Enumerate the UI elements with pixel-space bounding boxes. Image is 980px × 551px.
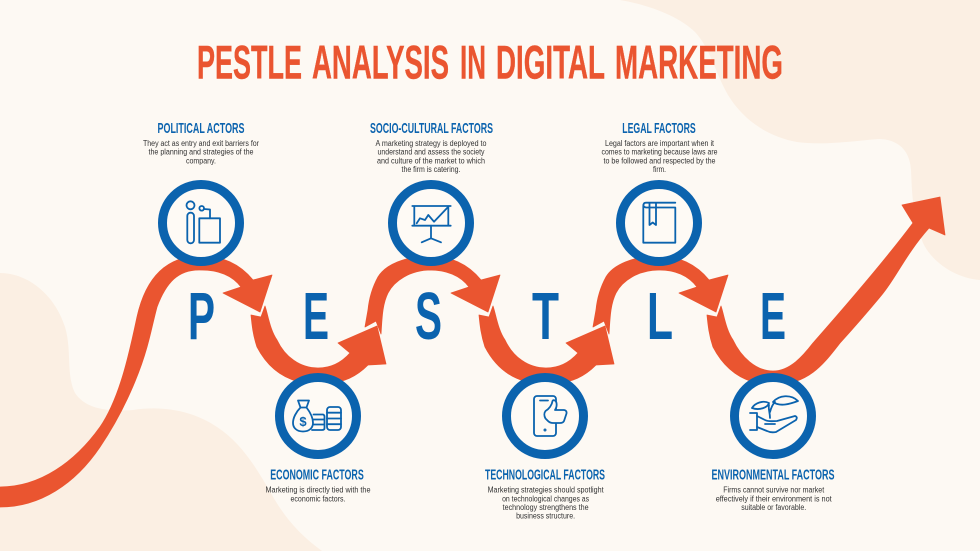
description: technology strengthens the xyxy=(503,503,589,512)
description: business structure. xyxy=(516,512,575,521)
letters: PESTLE: T xyxy=(532,279,559,354)
letters: PESTLE: S xyxy=(415,279,442,354)
description xyxy=(266,486,371,503)
description: on technological changes as xyxy=(502,494,589,503)
description xyxy=(143,139,259,165)
background blob: bottom left xyxy=(0,273,322,551)
heading: ECONOMIC FACTORS xyxy=(270,466,364,484)
title: PESTLE xyxy=(197,36,302,90)
arrow path xyxy=(0,197,945,507)
description: to be followed and respected by the xyxy=(604,156,716,165)
icon: speaker at podium xyxy=(186,201,220,243)
icon: presentation board xyxy=(412,206,451,242)
panel: legal factors xyxy=(602,120,718,262)
description: A marketing strategy is deployed to xyxy=(376,139,487,148)
description: comes to marketing because laws are xyxy=(602,148,718,157)
description: and culture of the market to which xyxy=(377,156,485,165)
description: company. xyxy=(186,156,216,165)
icon: dollar sign: $ xyxy=(299,414,307,429)
arrow head after L xyxy=(659,256,728,312)
icon ring xyxy=(734,378,812,454)
icon ring xyxy=(392,184,470,262)
arrow segment: through T xyxy=(479,306,614,384)
heading: SOCIO-CULTURAL FACTORS xyxy=(370,120,493,137)
letters: PESTLE xyxy=(188,279,786,354)
arrow segment: through E to final arrow head xyxy=(707,197,945,385)
icon: book with bookmark xyxy=(643,203,675,243)
icon ring xyxy=(506,378,584,454)
description: suitable or favorable. xyxy=(741,503,806,512)
description: firm. xyxy=(653,165,666,174)
heading: TECHNOLOGICAL FACTORS xyxy=(485,466,605,484)
icon ring xyxy=(162,184,240,262)
title: ANALYSIS xyxy=(312,36,449,90)
panel: technological factors xyxy=(485,378,605,521)
letters: PESTLE: E xyxy=(760,279,786,354)
heading: LEGAL FACTORS xyxy=(622,120,696,137)
panel: economic factors xyxy=(266,378,371,503)
icon: phone with thumbs up xyxy=(534,396,567,436)
heading: POLITICAL ACTORS xyxy=(158,120,244,137)
arrow head after P xyxy=(201,256,272,312)
panel: environmental factors xyxy=(712,378,834,512)
title xyxy=(197,36,783,90)
description: Firms cannot survive nor market xyxy=(723,486,825,495)
arrow segment: rising to L xyxy=(593,256,659,334)
arrow head after S xyxy=(429,256,500,312)
description xyxy=(716,486,832,512)
title: DIGITAL xyxy=(496,36,605,90)
icon ring xyxy=(280,378,356,454)
icon ring xyxy=(620,184,698,262)
arrow segment: through E xyxy=(251,306,386,384)
description: the firm is catering. xyxy=(402,165,460,174)
arrow segment: tail rising to P xyxy=(0,256,201,507)
description: They act as entry and exit barriers for xyxy=(143,139,259,148)
panel: political actors xyxy=(143,120,259,262)
description: Marketing is directly tied with the xyxy=(266,486,371,495)
title: MARKETING xyxy=(615,36,783,90)
letters: PESTLE: E xyxy=(303,279,329,354)
description: economic factors. xyxy=(290,494,346,503)
description xyxy=(602,139,718,174)
description: effectively if their environment is not xyxy=(716,494,832,503)
heading: ENVIRONMENTAL FACTORS xyxy=(712,466,834,484)
letters: PESTLE: P xyxy=(188,279,215,354)
description: understand and assess the society xyxy=(378,148,484,157)
description: the planning and strategies of the xyxy=(148,148,254,157)
description xyxy=(376,139,487,174)
icon: money bag and coins xyxy=(293,400,341,432)
title: IN xyxy=(460,36,486,90)
panel: socio-cultural factors xyxy=(370,120,493,262)
background blob: top right xyxy=(620,0,980,280)
description xyxy=(488,486,604,521)
arrow segment: rising to S xyxy=(365,256,431,334)
icon: hand holding plant xyxy=(750,396,798,432)
letters: PESTLE: L xyxy=(647,279,673,354)
description: Marketing strategies should spotlight xyxy=(488,486,604,495)
description: Legal factors are important when it xyxy=(605,139,715,148)
